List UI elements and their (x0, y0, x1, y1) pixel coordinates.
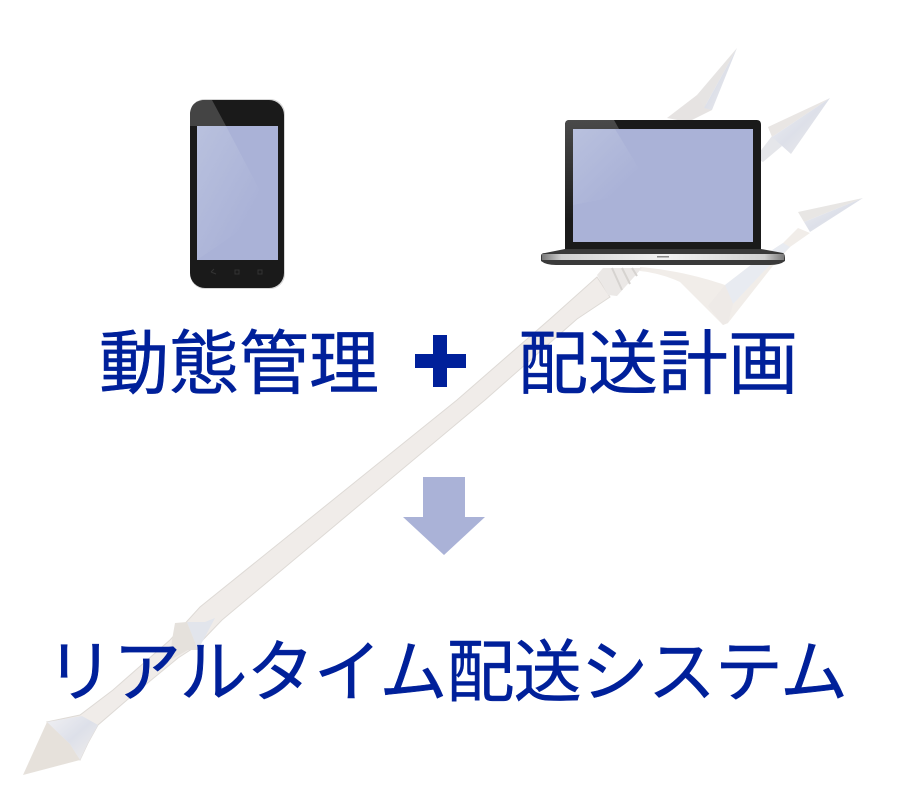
icon: smartphone (190, 99, 285, 289)
icon: laptop (541, 120, 785, 265)
trident middle prong shaft (755, 136, 782, 162)
laptop base (541, 249, 785, 265)
heading: delivery planning: 配送計画 (518, 325, 798, 403)
trident fork (640, 228, 810, 325)
trident right prong head (798, 198, 863, 232)
arrow: down (403, 477, 485, 555)
heading: real-time delivery system: リアルタイム配送システム (46, 635, 848, 711)
icon: plus sign (415, 335, 466, 387)
trident shaft (47, 277, 610, 760)
phone buttons (211, 269, 262, 274)
trident left prong shaft (667, 95, 712, 122)
trident bottom spearhead (23, 716, 98, 775)
trident middle node (170, 618, 215, 660)
laptop screen (573, 129, 753, 242)
trident middle prong head (768, 98, 830, 154)
trident left prong head (697, 48, 737, 110)
phone screen (197, 126, 278, 260)
trident collar (597, 268, 642, 296)
heading: location management: 動態管理 (99, 325, 379, 403)
laptop lid (565, 120, 761, 252)
